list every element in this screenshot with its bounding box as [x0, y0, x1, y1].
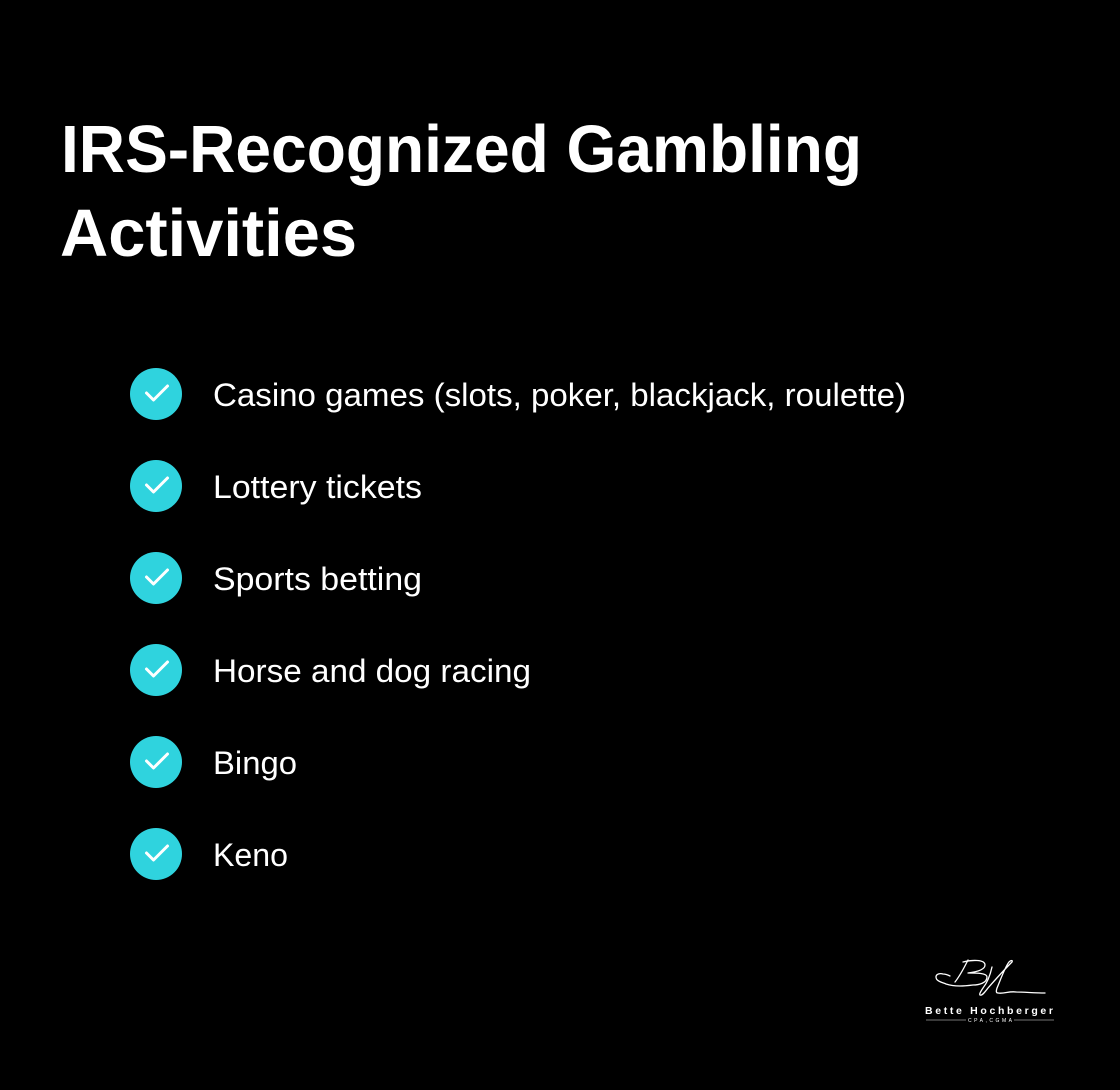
checklist [130, 368, 906, 880]
logo name: Bette Hochberger [925, 1005, 1053, 1017]
list item: casino games: Casino games (slots, poker, blackjack, roulette) [213, 377, 906, 413]
logo rules [926, 1019, 1054, 1021]
title: IRS-Recognized Gambling [61, 112, 862, 187]
logo credentials: CPA,CGMA [968, 1018, 1013, 1024]
list item: lottery tickets [130, 460, 422, 512]
logo signature monogram [936, 960, 1045, 995]
list item: sports betting [130, 552, 422, 604]
list item: keno [130, 828, 288, 880]
list item: lottery tickets: Lottery tickets [213, 469, 422, 505]
list item: keno: Keno [213, 837, 288, 873]
list item: horse and dog racing [130, 644, 531, 696]
logo: Bette Hochberger [925, 960, 1054, 1024]
list item: casino games [130, 368, 906, 420]
list item: bingo [130, 736, 297, 788]
list item: horse and dog racing: Horse and dog racing [213, 653, 531, 689]
list item: sports betting: Sports betting [213, 561, 422, 597]
title: Activities [60, 196, 357, 271]
title [60, 112, 862, 271]
list item: bingo: Bingo [213, 745, 297, 781]
